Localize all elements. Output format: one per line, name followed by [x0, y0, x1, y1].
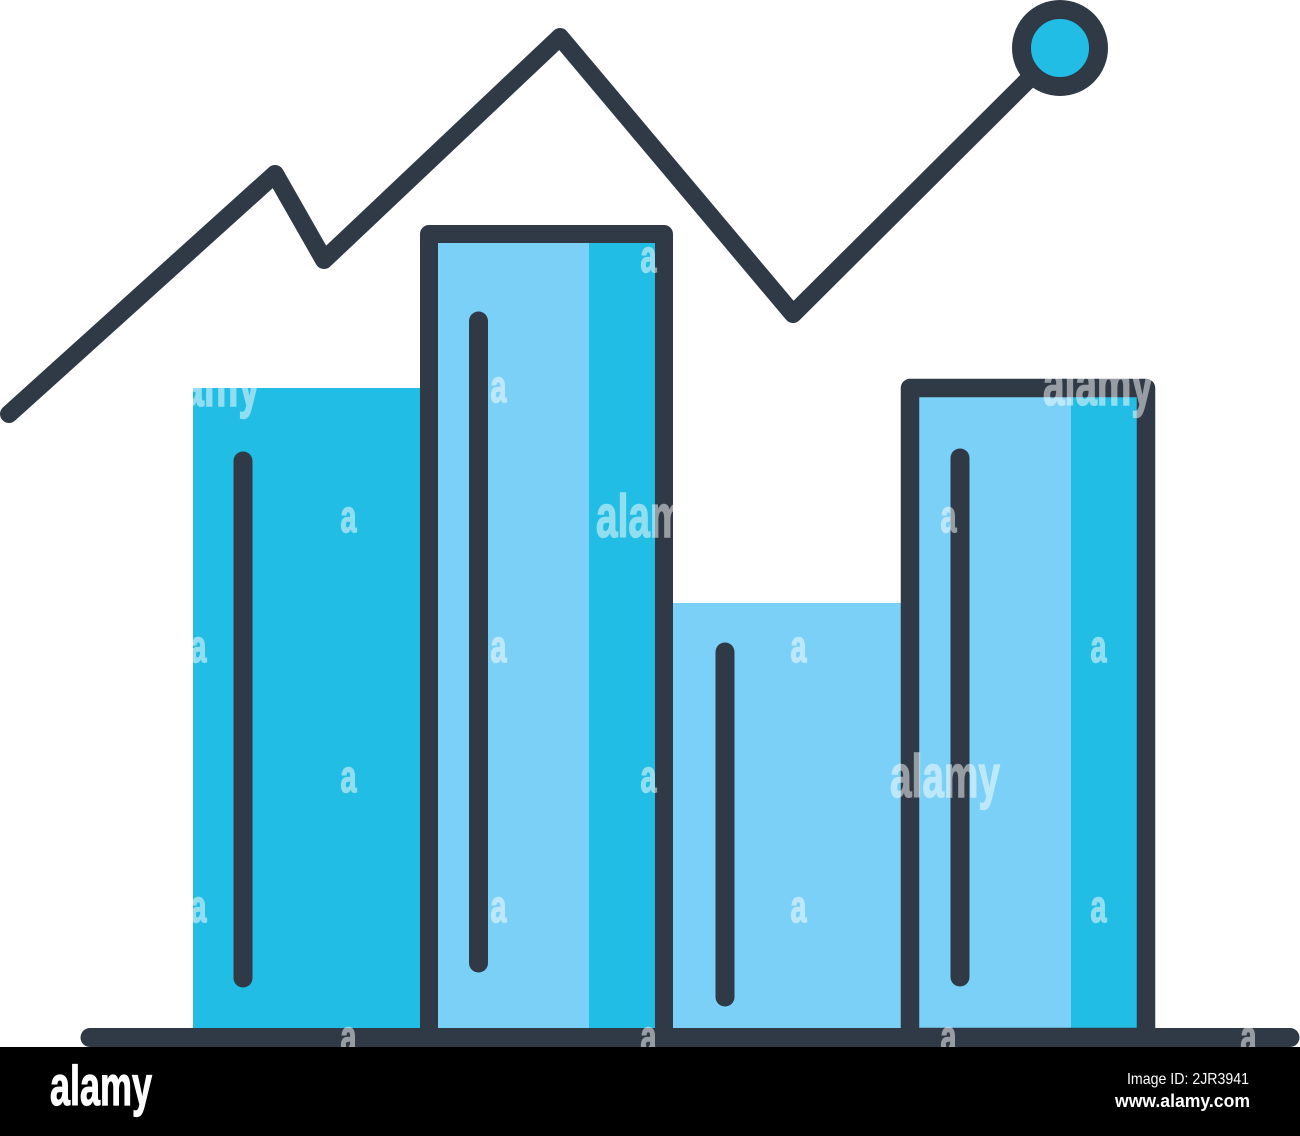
watermark overlay: a: [490, 361, 507, 412]
image id: Image ID: 2JR3941: [1127, 1071, 1249, 1088]
watermark overlay: a: [340, 751, 357, 802]
watermark overlay: alamy: [890, 743, 1000, 810]
footer band: [0, 1047, 1300, 1136]
website: www.alamy.com: [1114, 1091, 1250, 1111]
watermark overlay: a: [1240, 1011, 1257, 1062]
watermark overlay: a: [640, 231, 657, 282]
bar 4: outlined bar: [910, 388, 1146, 1037]
watermark overlay: alamy: [150, 352, 260, 419]
bar 2: tall outlined bar: [429, 234, 664, 1037]
bar 1: solid cyan bar: [193, 388, 421, 1030]
watermark overlay: a: [340, 1011, 357, 1062]
watermark overlay: a: [1090, 881, 1107, 932]
watermark overlay: alamy: [1043, 351, 1153, 418]
bar 4 highlight line: [950, 458, 970, 977]
footer logo: alamy: [50, 1054, 152, 1117]
bar 2 highlight line: [469, 321, 488, 963]
bar 3: solid light blue bar: [672, 603, 902, 1030]
trend line end marker: [1022, 10, 1098, 86]
watermark overlay: a: [790, 621, 807, 672]
bar 3 highlight line: [716, 652, 734, 997]
watermark overlay: a: [640, 1011, 657, 1062]
watermark overlay: a: [190, 621, 207, 672]
trend line: [9, 37, 1035, 414]
watermark overlay: a: [490, 621, 507, 672]
watermark overlay: a: [1090, 621, 1107, 672]
watermark overlay: a: [790, 881, 807, 932]
bar 1 highlight line: [234, 461, 252, 978]
watermark overlay: [150, 231, 1257, 1062]
watermark overlay: a: [490, 881, 507, 932]
watermark overlay: a: [190, 881, 207, 932]
watermark overlay: a: [340, 491, 357, 542]
watermark overlay: alamy: [596, 483, 706, 550]
watermark overlay: a: [940, 1011, 957, 1062]
watermark overlay: a: [640, 751, 657, 802]
baseline axis: [90, 1028, 1290, 1047]
watermark overlay: a: [940, 491, 957, 542]
